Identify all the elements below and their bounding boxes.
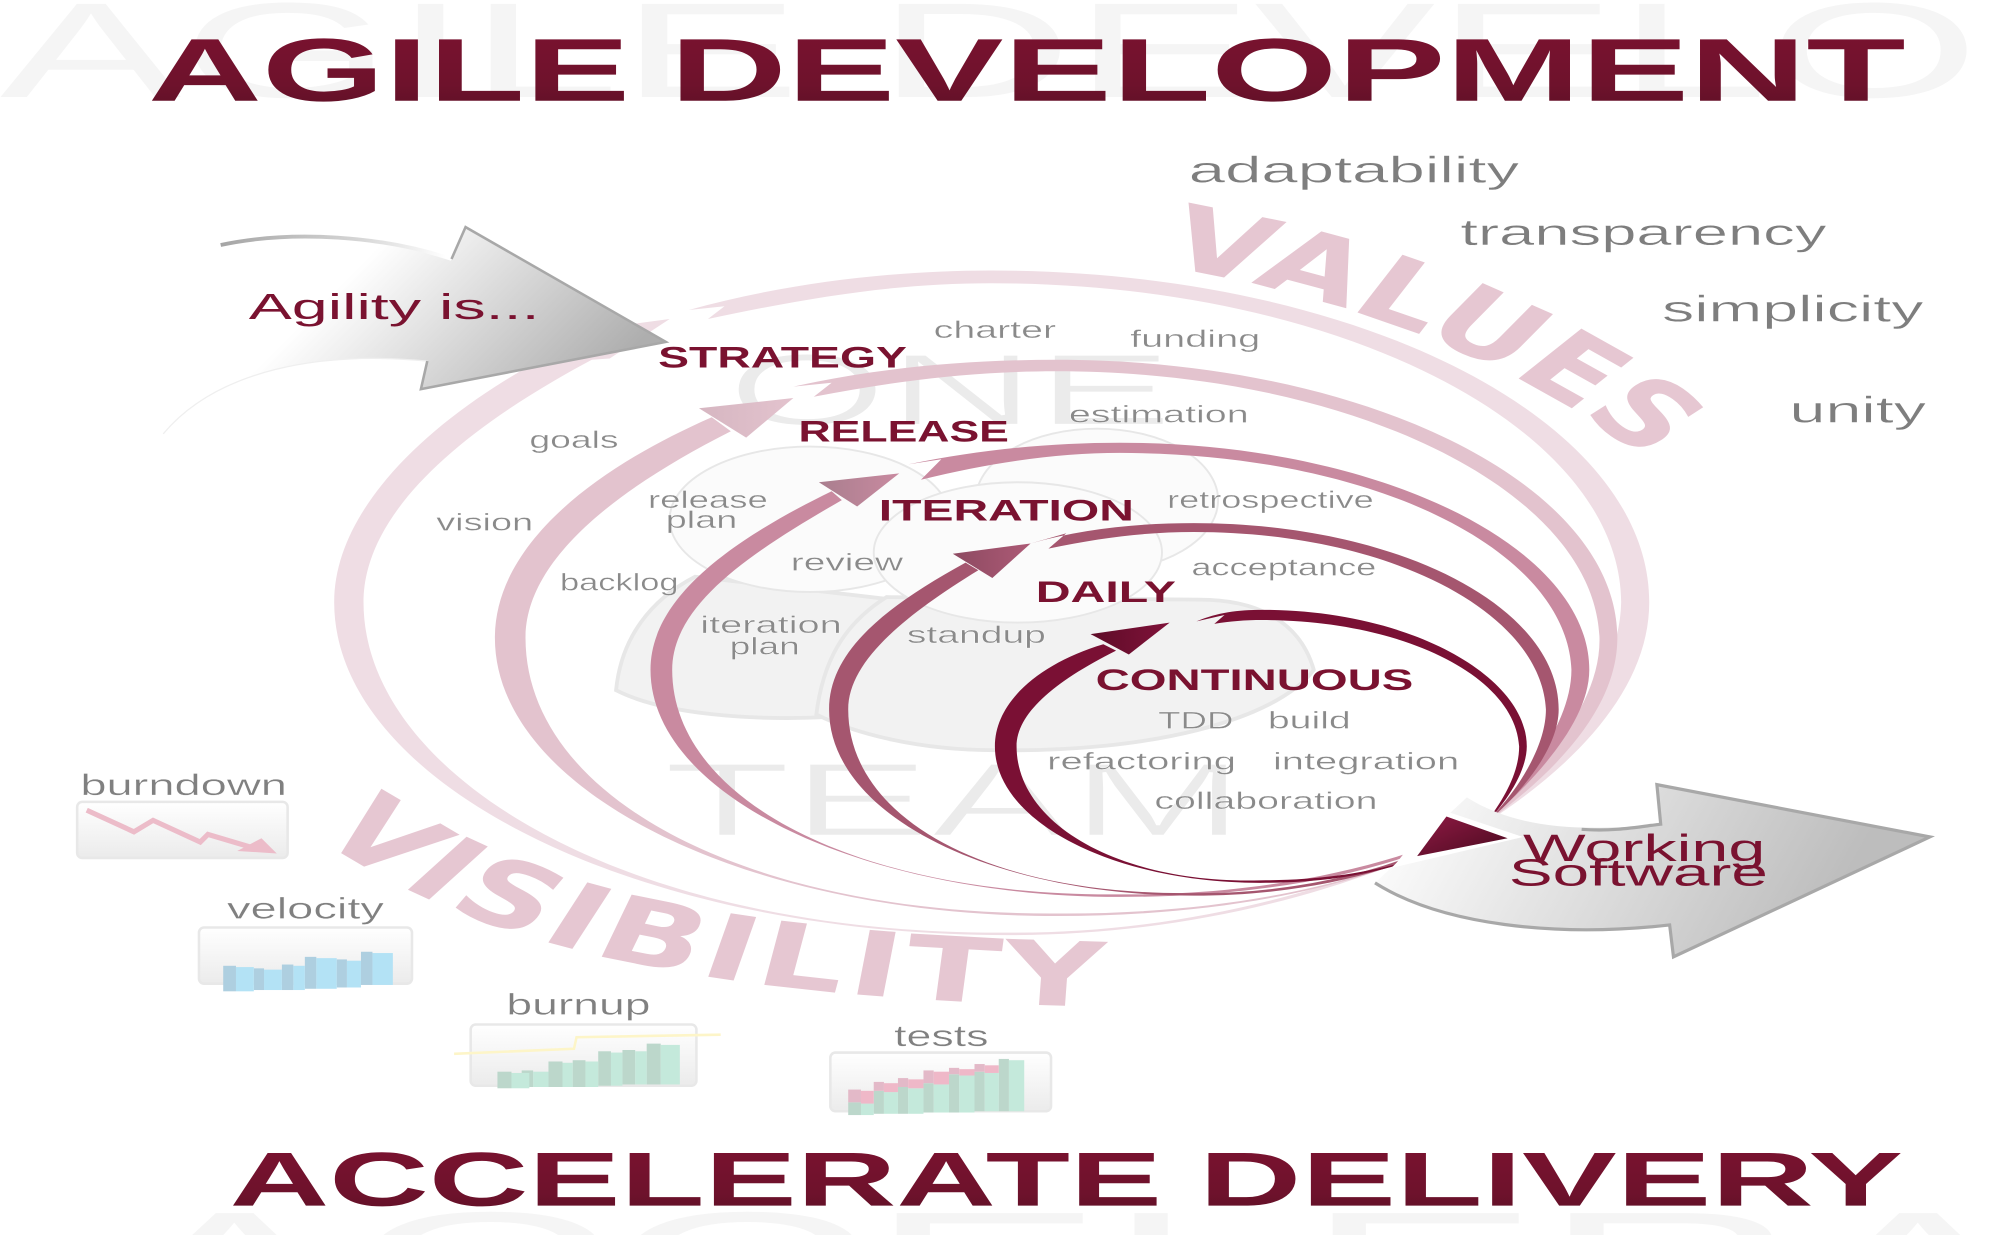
chart: tests: tests (894, 1020, 989, 1053)
practice labels: charter (934, 317, 1056, 344)
subtitle: accelerate delivery: ACCELERATE (230, 1138, 1162, 1223)
title: AGILE (148, 20, 630, 120)
chart: tests (830, 1020, 1051, 1115)
spiral: release (495, 360, 1617, 916)
practice labels: funding (1130, 326, 1260, 353)
spiral: iteration (651, 443, 1589, 897)
practice labels: refactoring (1047, 748, 1236, 775)
practice labels: vision (436, 510, 533, 537)
title: DEVELOPMENT (670, 20, 1906, 120)
word: values: VALUES (1188, 202, 1703, 447)
arrow label: working software (1509, 827, 1768, 894)
ghost word: team: TEAM (663, 742, 1245, 859)
practice labels: goals (529, 427, 619, 454)
values list: adaptability (1189, 149, 1520, 190)
stage headings: STRATEGY (658, 341, 908, 374)
practice labels: integration (1273, 748, 1459, 775)
practice labels: collaboration (1154, 788, 1378, 815)
values list (1189, 149, 1927, 430)
arrow label: agility is: Agility is... (249, 287, 540, 327)
practice labels: standup (907, 622, 1046, 649)
stage headings: DAILY (1036, 576, 1177, 609)
spiral: daily (829, 523, 1559, 896)
practice labels: TDD (1158, 707, 1233, 734)
stage headings: RELEASE (798, 415, 1009, 448)
practice labels: release (648, 487, 768, 514)
practice labels (436, 317, 1459, 815)
values list: simplicity (1662, 289, 1924, 330)
ghost team figures (616, 429, 1314, 750)
arrow label: working software: Working (1523, 827, 1765, 870)
title (148, 20, 1906, 120)
spiral: strategy (334, 270, 1649, 935)
practice labels: acceptance (1191, 554, 1376, 581)
practice labels: plan (666, 507, 737, 534)
arrow: agility is (163, 227, 666, 434)
spiral: continuous (995, 610, 1527, 883)
practice labels: build (1268, 707, 1351, 734)
chart: burnup: burnup (506, 988, 651, 1021)
arrow label: working software: Software (1509, 851, 1768, 894)
chart: burndown: burndown (80, 769, 287, 802)
practice labels: plan (730, 633, 800, 660)
subtitle: accelerate delivery (230, 1138, 1903, 1223)
arrow: working software (1375, 785, 1930, 957)
chart: burndown (77, 769, 288, 858)
chart: velocity: velocity (227, 893, 384, 926)
practice labels: backlog (560, 570, 679, 597)
stage headings (658, 341, 1413, 697)
practice labels: iteration (700, 612, 842, 639)
stage headings: CONTINUOUS (1096, 664, 1413, 697)
arrowhead: delivery (1417, 817, 1508, 856)
values list: transparency (1460, 212, 1827, 253)
values list: unity (1790, 389, 1927, 430)
practice labels: estimation (1069, 401, 1249, 428)
chart: velocity (199, 893, 412, 991)
subtitle: accelerate delivery: DELIVERY (1199, 1138, 1903, 1223)
word: visibility: VISIBILITY (341, 788, 1108, 1006)
chart: burnup (454, 988, 721, 1088)
practice labels: review (791, 549, 904, 576)
practice labels: retrospective (1167, 487, 1374, 514)
stage headings: ITERATION (879, 495, 1134, 528)
ghost word: one: ONE (727, 333, 1173, 447)
